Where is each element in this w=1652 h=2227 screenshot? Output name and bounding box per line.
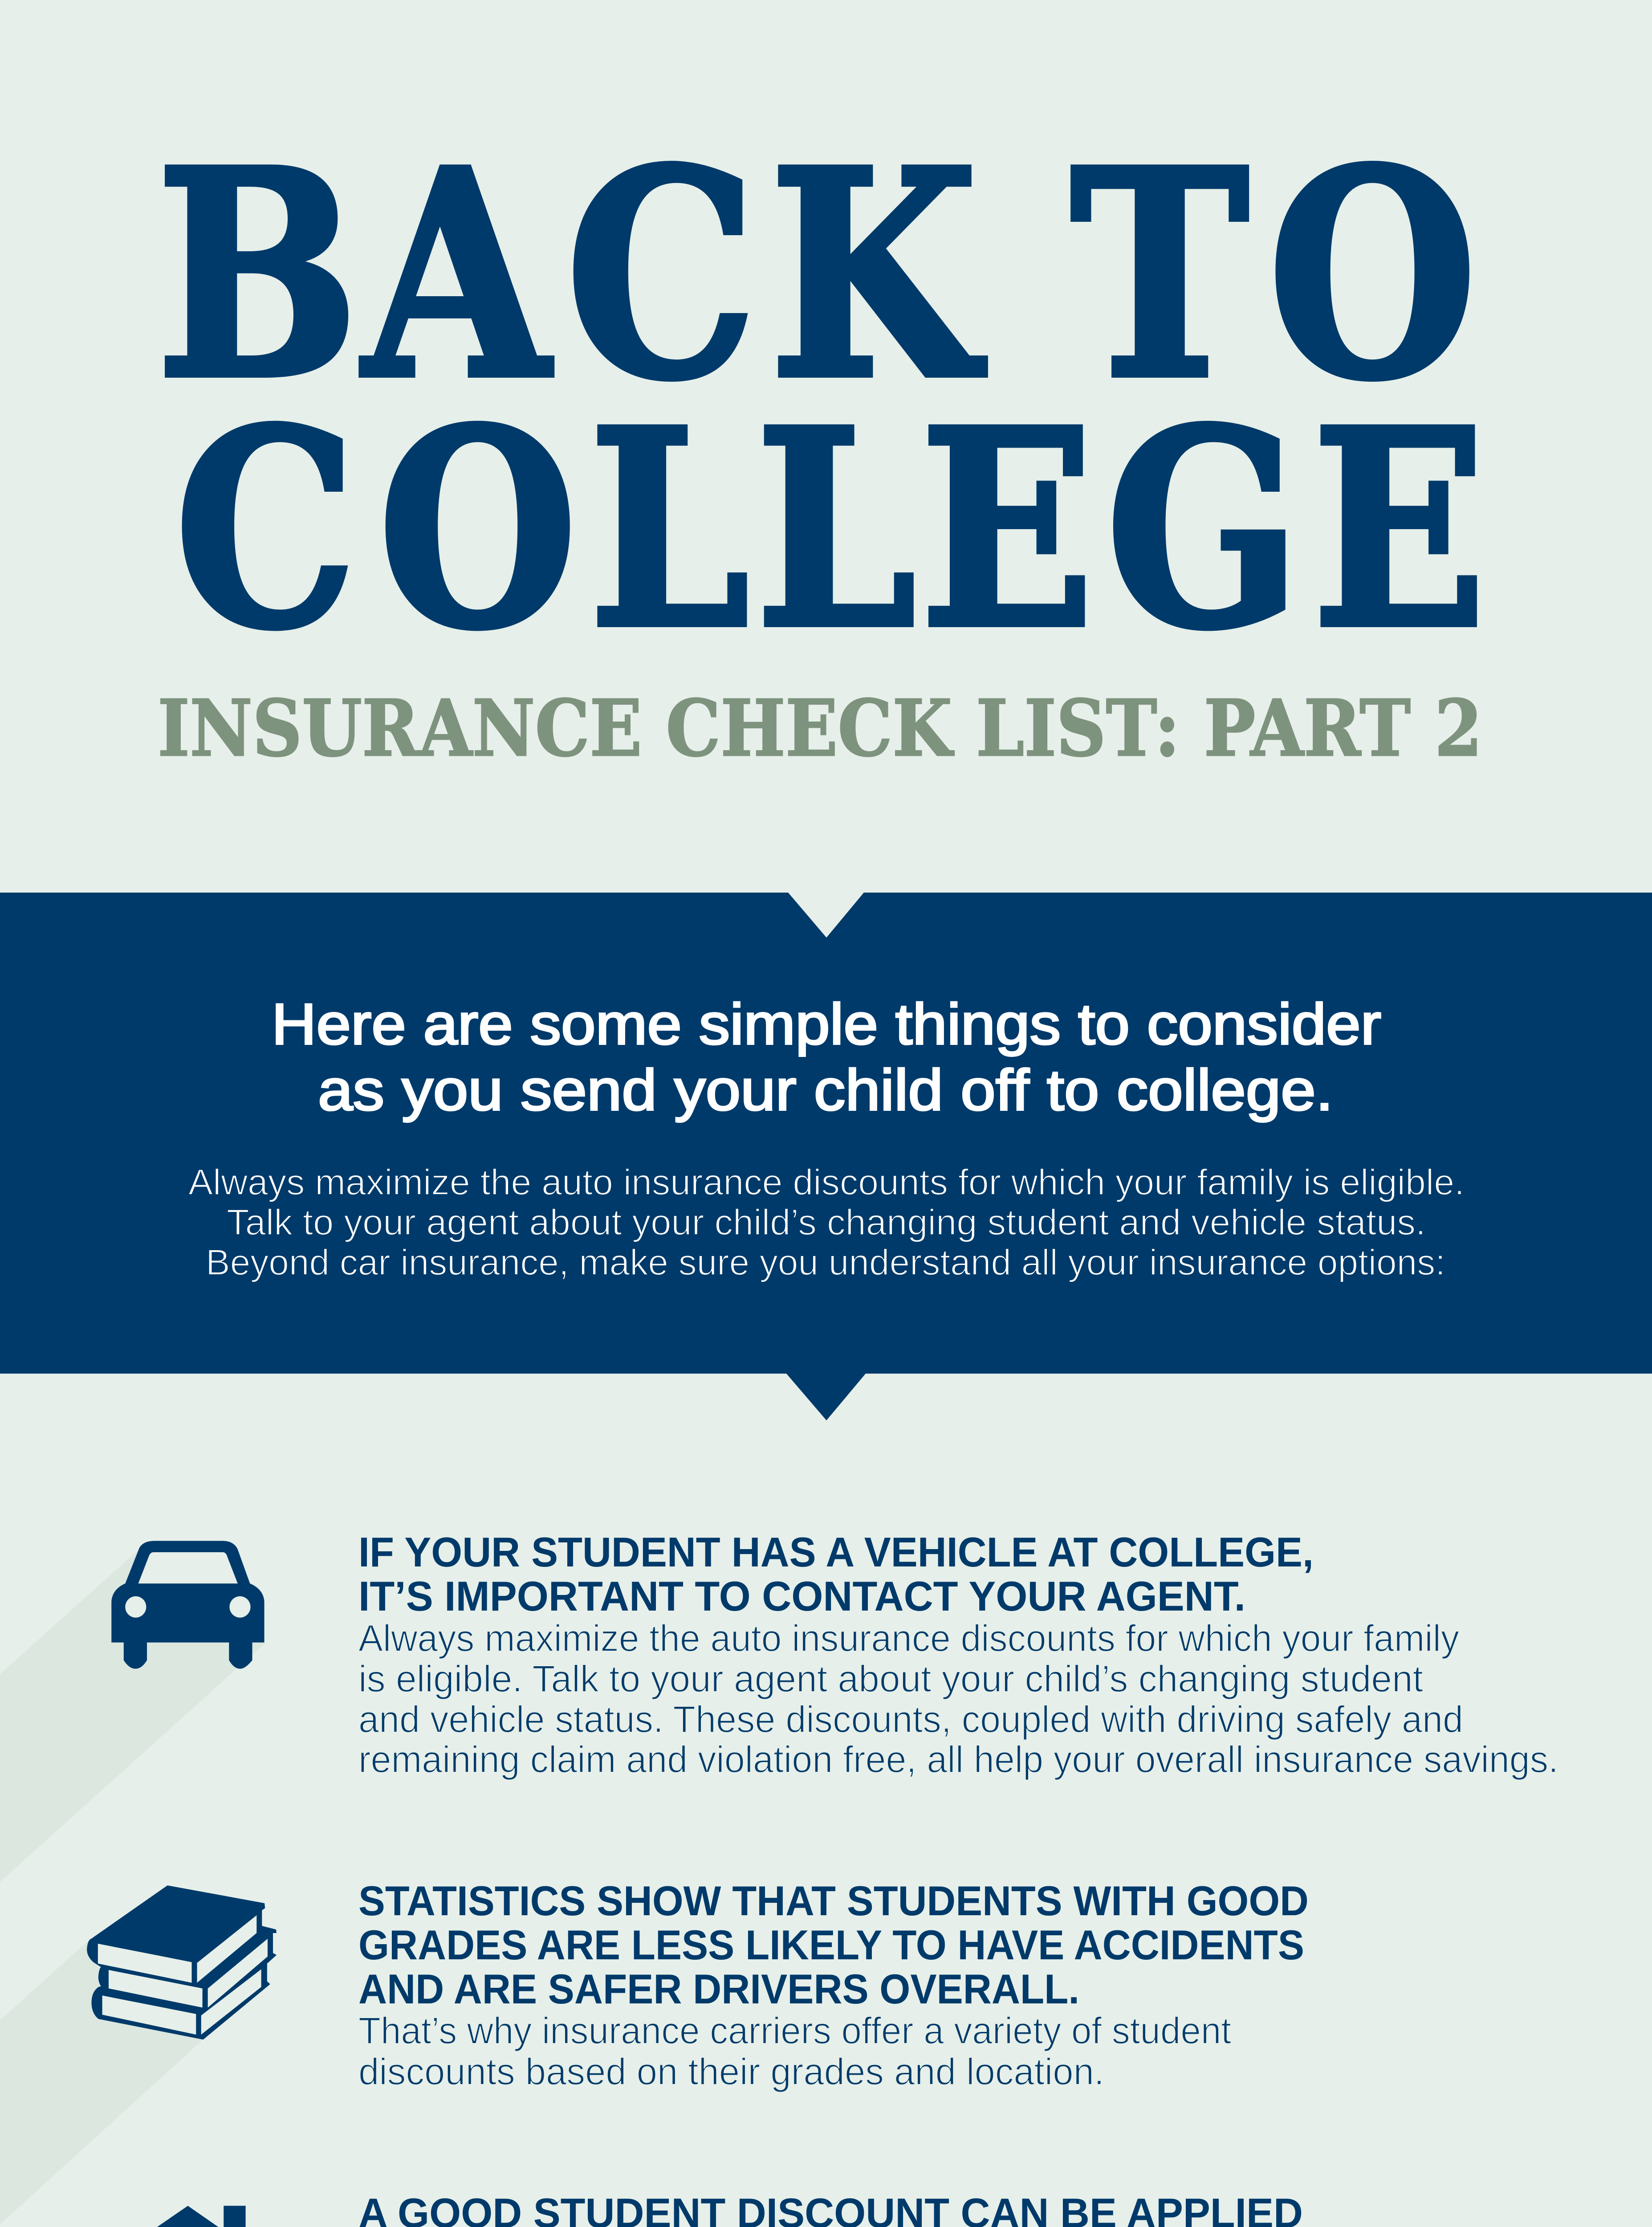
intro text: Beyond car insurance, make sure you understand all your insurance options: — [206, 1242, 1445, 1283]
intro heading: Here are some simple things to consider — [272, 991, 1381, 1056]
item 1 heading — [358, 1529, 1314, 1619]
item 2 text — [358, 2010, 1231, 2092]
intro text: Talk to your agent about your child’s changing student and vehicle status. — [227, 1202, 1426, 1243]
title: Back to College: BACK TO — [156, 107, 1477, 442]
icon: car — [111, 1541, 264, 1669]
intro text: Always maximize the auto insurance discounts for which your family is eligible. — [188, 1162, 1465, 1203]
item 2 text: discounts based on their grades and location. — [358, 2051, 1104, 2092]
item 1 text: remaining claim and violation free, all help your overall insurance savings. — [358, 1738, 1558, 1780]
panel: intro band — [0, 893, 1652, 1420]
item 2 heading — [358, 1877, 1309, 2012]
item 1 text: and vehicle status. These discounts, coupled with driving safely and — [358, 1698, 1463, 1740]
intro heading — [272, 991, 1381, 1122]
item 2 heading: STATISTICS SHOW THAT STUDENTS WITH GOOD — [358, 1877, 1309, 1924]
item 2 — [358, 1877, 1309, 2092]
item 1 — [358, 1529, 1558, 1780]
subtitle: INSURANCE CHECK LIST: PART 2 — [158, 683, 1482, 774]
icon: books — [87, 1885, 277, 2039]
item 2 heading: GRADES ARE LESS LIKELY TO HAVE ACCIDENTS — [358, 1921, 1304, 1968]
long shadows behind icons — [0, 1549, 264, 2227]
item 1 text — [358, 1617, 1558, 1780]
intro heading: as you send your child off to college. — [318, 1057, 1333, 1122]
title: Back to College: COLLEGE — [175, 371, 1486, 689]
item 1 heading: IF YOUR STUDENT HAS A VEHICLE AT COLLEGE, — [358, 1529, 1314, 1575]
title: Back to College — [156, 107, 1486, 689]
item 1 text: Always maximize the auto insurance discounts for which your family — [358, 1617, 1459, 1659]
item 1 heading: IT’S IMPORTANT TO CONTACT YOUR AGENT. — [358, 1573, 1245, 1619]
intro text — [188, 1162, 1465, 1283]
icon: house — [111, 2206, 264, 2227]
item 2 heading: AND ARE SAFER DRIVERS OVERALL. — [358, 1966, 1079, 2012]
item 2 text: That’s why insurance carriers offer a variety of student — [358, 2010, 1231, 2052]
item 1 text: is eligible. Talk to your agent about your child’s changing student — [358, 1658, 1423, 1700]
